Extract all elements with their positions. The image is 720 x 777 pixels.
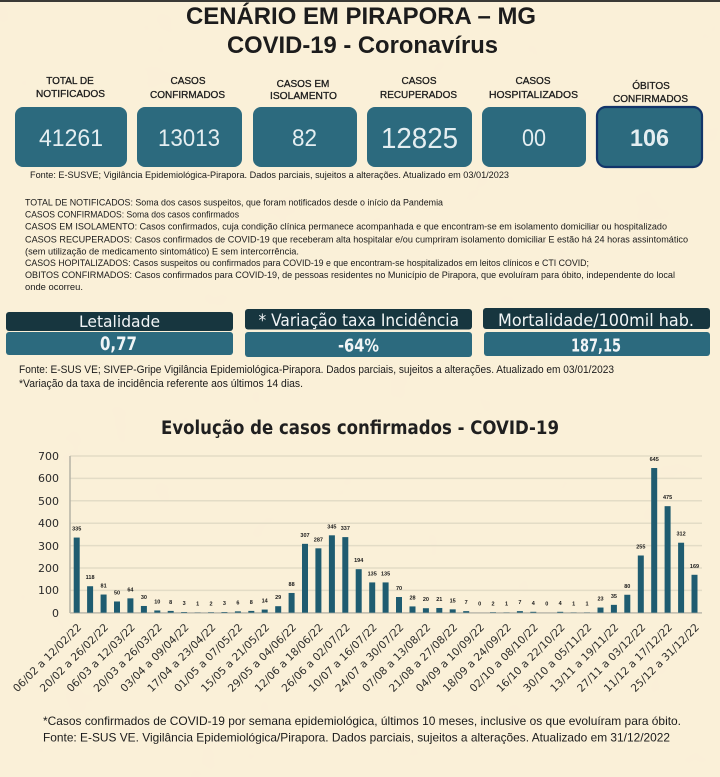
x axis week labels: 12/06 a 18/06/22 — [253, 622, 326, 695]
source note: rates — [19, 364, 614, 390]
panel: casos recuperados: CASOS — [401, 76, 437, 87]
y axis labels: 700 — [38, 450, 59, 463]
bar value labels: 1 — [196, 602, 199, 608]
y axis labels: 0 — [52, 607, 59, 620]
bar value labels: 3 — [223, 601, 226, 607]
x axis week labels: 24/07 a 30/07/22 — [333, 622, 406, 695]
definitions text block: OBITOS CONFIRMADOS: Casos confirmados para COVID-19, de pessoas residentes no Município de Pirapora, que evoluíram para óbito, independente do local — [25, 270, 675, 281]
x axis week labels: 17/04 a 23/04/22 — [145, 622, 218, 695]
x axis week labels: 20/02 a 26/02/22 — [38, 622, 111, 695]
y axis labels: 300 — [38, 540, 59, 553]
bar value labels: 50 — [114, 590, 120, 596]
bar value labels: 345 — [327, 524, 336, 530]
panel: casos hospitalizados: 00 — [522, 125, 546, 152]
bar value labels: 255 — [636, 544, 645, 550]
footer note: Fonte: E-SUS VE. Vigilância Epidemiológica/Pirapora. Dados parciais, sujeitos a alterações. Atualizado em 31/12/2022 — [43, 730, 670, 744]
panel: obitos confirmados: 106 — [630, 125, 669, 152]
panel: variacao taxa incidencia: * Variação taxa Incidência — [258, 311, 459, 330]
panel: letalidade: 0,77 — [100, 333, 137, 355]
panel: obitos confirmados: CONFIRMADOS — [613, 94, 688, 105]
chart title: Evolução de casos confirmados - COVID-19 — [161, 418, 559, 439]
x axis week labels: 11/12 a 17/12/22 — [602, 622, 675, 695]
definitions text block: (sem utilização de medicamento sintomático) E sem intercorrência. — [25, 246, 299, 258]
bar value labels: 307 — [300, 533, 310, 539]
bar value labels: 6 — [236, 600, 239, 606]
x axis week labels: 20/03 a 26/03/22 — [92, 622, 165, 695]
bar value labels: 20 — [423, 597, 429, 603]
title: COVID-19 - Coronavírus — [227, 32, 498, 59]
footer note: *Casos confirmados de COVID-19 por semana epidemiológica, últimos 10 meses, inclusive os que evoluíram para óbito. — [43, 714, 681, 728]
bar value labels: 475 — [663, 495, 672, 501]
y axis labels: 500 — [38, 495, 59, 508]
bar value labels: 4 — [559, 601, 563, 607]
y axis labels: 400 — [38, 517, 59, 530]
bar value labels: 3 — [183, 601, 186, 607]
x axis week labels: 03/04 a 09/04/22 — [118, 622, 192, 695]
definitions text block: CASOS EM ISOLAMENTO: Casos confirmados, cuja condição clínica permanece acompanhada e que encontram-se em isolamento domiciliar ou hospitalizado — [25, 222, 667, 232]
bar value labels: 7 — [465, 600, 468, 606]
panel: casos recuperados — [367, 76, 472, 167]
panel: casos recuperados: RECUPERADOS — [380, 90, 457, 101]
x axis week labels: 16/10 a 22/10/22 — [495, 622, 568, 695]
bar value labels: 645 — [650, 457, 659, 463]
panel: casos hospitalizados: CASOS — [515, 76, 551, 87]
bar value labels: 287 — [314, 537, 323, 543]
bar value labels: 88 — [289, 582, 295, 588]
bar value labels: 1 — [585, 602, 589, 608]
title: CENÁRIO EM PIRAPORA – MG — [186, 2, 536, 30]
panel: casos em isolamento — [253, 79, 357, 167]
x axis week labels: 18/09 a 24/09/22 — [441, 622, 514, 695]
bar value labels: 7 — [518, 600, 521, 606]
bar value labels: 1 — [572, 602, 575, 608]
panel: casos confirmados — [137, 76, 242, 167]
x axis week labels: 13/11 a 19/11/22 — [548, 622, 621, 695]
bars — [74, 468, 697, 613]
bar value labels: 135 — [368, 571, 377, 577]
bar value labels: 118 — [86, 575, 95, 581]
bar value labels: 194 — [354, 558, 364, 564]
source note: indicators: Fonte: E-SUSVE; Vigilância Epidemiológica-Pirapora. Dados parciais, sujeitos a alterações. Atualizado em 03/01/2023 — [30, 170, 509, 180]
bar value labels: 29 — [275, 595, 281, 601]
bar value labels: 337 — [341, 526, 350, 532]
panel: total de notificados: 41261 — [39, 125, 103, 152]
x axis week labels: 27/11 a 03/12/22 — [575, 622, 648, 695]
bar value labels: 4 — [532, 601, 536, 607]
bar value labels: 28 — [409, 595, 416, 601]
panel: letalidade — [6, 312, 233, 355]
definitions text block: CASOS HOPITALIZADOS: Casos suspeitos ou confirmados para COVID-19 e que encontram-se hospitalizados em leitos clínicos e CTI COVID; — [25, 258, 589, 269]
bar value labels: 135 — [381, 571, 390, 577]
bar value labels: 8 — [250, 600, 253, 606]
x axis week labels: 21/08 a 27/08/22 — [387, 622, 460, 695]
definitions text block — [25, 198, 688, 293]
panel: casos em isolamento: ISOLAMENTO — [270, 91, 337, 102]
x axis week labels: 30/10 a 05/11/22 — [521, 622, 594, 695]
x axis week labels: 04/09 a 10/09/22 — [414, 622, 487, 695]
panel: casos em isolamento: 82 — [292, 125, 317, 152]
bar value labels: 21 — [436, 597, 442, 603]
y axis labels: 600 — [38, 472, 59, 485]
panel: letalidade: Letalidade — [79, 312, 160, 331]
bar value labels: 0 — [478, 602, 481, 608]
bar value labels: 15 — [450, 598, 456, 604]
bar value labels: 1 — [505, 602, 508, 608]
panel: total de notificados — [15, 76, 127, 167]
y axis labels: 200 — [38, 562, 59, 575]
x axis week labels: 06/02 a 12/02/22 — [11, 622, 84, 695]
x axis week labels: 01/05 a 07/05/22 — [172, 622, 245, 695]
x axis week labels: 26/06 a 02/07/22 — [280, 622, 353, 695]
bar value labels: 14 — [262, 599, 269, 605]
panel: casos hospitalizados — [482, 76, 586, 167]
x axis week labels: 29/05 a 04/06/22 — [226, 622, 299, 695]
panel: total de notificados: TOTAL DE — [46, 76, 94, 87]
definitions text block: CASOS CONFIRMADOS: Soma dos casos confirmados — [25, 210, 239, 220]
title — [186, 2, 536, 59]
bar value labels: 70 — [396, 586, 402, 592]
definitions text block: CASOS RECUPERADOS: Casos confirmados de COVID-19 que receberam alta hospitalar e/ou cumpriram isolamento domiciliar E estão há 24 horas assintomático — [25, 234, 688, 246]
bar value labels: 0 — [545, 602, 548, 608]
panel: casos confirmados: CONFIRMADOS — [150, 90, 225, 101]
bar value labels — [72, 457, 699, 608]
panel: casos em isolamento: CASOS EM — [277, 79, 329, 90]
x axis week labels: 07/08 a 13/08/22 — [360, 622, 433, 695]
panel: obitos confirmados — [597, 79, 702, 167]
panel: total de notificados: NOTIFICADOS — [36, 89, 105, 100]
source note: rates: Fonte: E-SUS VE; SIVEP-Gripe Vigilância Epidemiológica-Pirapora. Dados parciais, sujeitos a alterações. Atualizado em 03/01/2023 — [19, 364, 614, 376]
x axis week labels: 02/10 a 08/10/22 — [468, 622, 541, 695]
panel: obitos confirmados: ÓBITOS — [632, 79, 670, 92]
bar value labels: 2 — [209, 601, 213, 607]
x axis week labels: 25/12 a 31/12/22 — [629, 622, 702, 695]
panel: casos recuperados: 12825 — [381, 123, 458, 155]
bar value labels: 80 — [624, 584, 630, 590]
panel: casos hospitalizados: HOSPITALIZADOS — [489, 90, 578, 101]
source note: rates: *Variação da taxa de incidência referente aos últimos 14 dias. — [19, 378, 303, 390]
bar value labels: 2 — [491, 601, 495, 607]
x axis week labels: 15/05 a 21/05/22 — [199, 622, 272, 695]
bar value labels: 81 — [101, 584, 107, 590]
bar value labels: 335 — [72, 527, 81, 533]
panel: variacao taxa incidencia: -64% — [338, 336, 379, 356]
bar value labels: 30 — [141, 595, 147, 601]
bar value labels: 64 — [127, 587, 134, 593]
panel: mortalidade: 187,15 — [571, 336, 621, 356]
panel: casos confirmados: CASOS — [170, 76, 206, 87]
definitions text block: TOTAL DE NOTIFICADOS: Soma dos casos suspeitos, que foram notificados desde o início da Pandemia — [25, 198, 444, 208]
footer note — [43, 714, 681, 744]
bar value labels: 10 — [154, 600, 160, 606]
panel: variacao taxa incidencia — [245, 309, 472, 357]
definitions text block: onde ocorreu. — [25, 282, 83, 293]
bar value labels: 35 — [611, 594, 617, 600]
bar value labels: 312 — [677, 532, 686, 538]
panel: mortalidade — [483, 308, 710, 356]
bar value labels: 23 — [597, 596, 604, 602]
y axis labels — [38, 450, 59, 620]
panel: casos confirmados: 13013 — [158, 125, 220, 152]
x axis week labels: 06/03 a 12/03/22 — [65, 622, 138, 695]
panel: mortalidade: Mortalidade/100mil hab. — [498, 311, 694, 330]
x axis week labels: 10/07 a 16/07/22 — [307, 622, 380, 695]
bar value labels: 169 — [690, 564, 699, 570]
y axis labels: 100 — [38, 584, 59, 597]
x axis week labels — [11, 622, 702, 695]
bar value labels: 8 — [169, 600, 172, 606]
bar chart — [11, 450, 702, 695]
